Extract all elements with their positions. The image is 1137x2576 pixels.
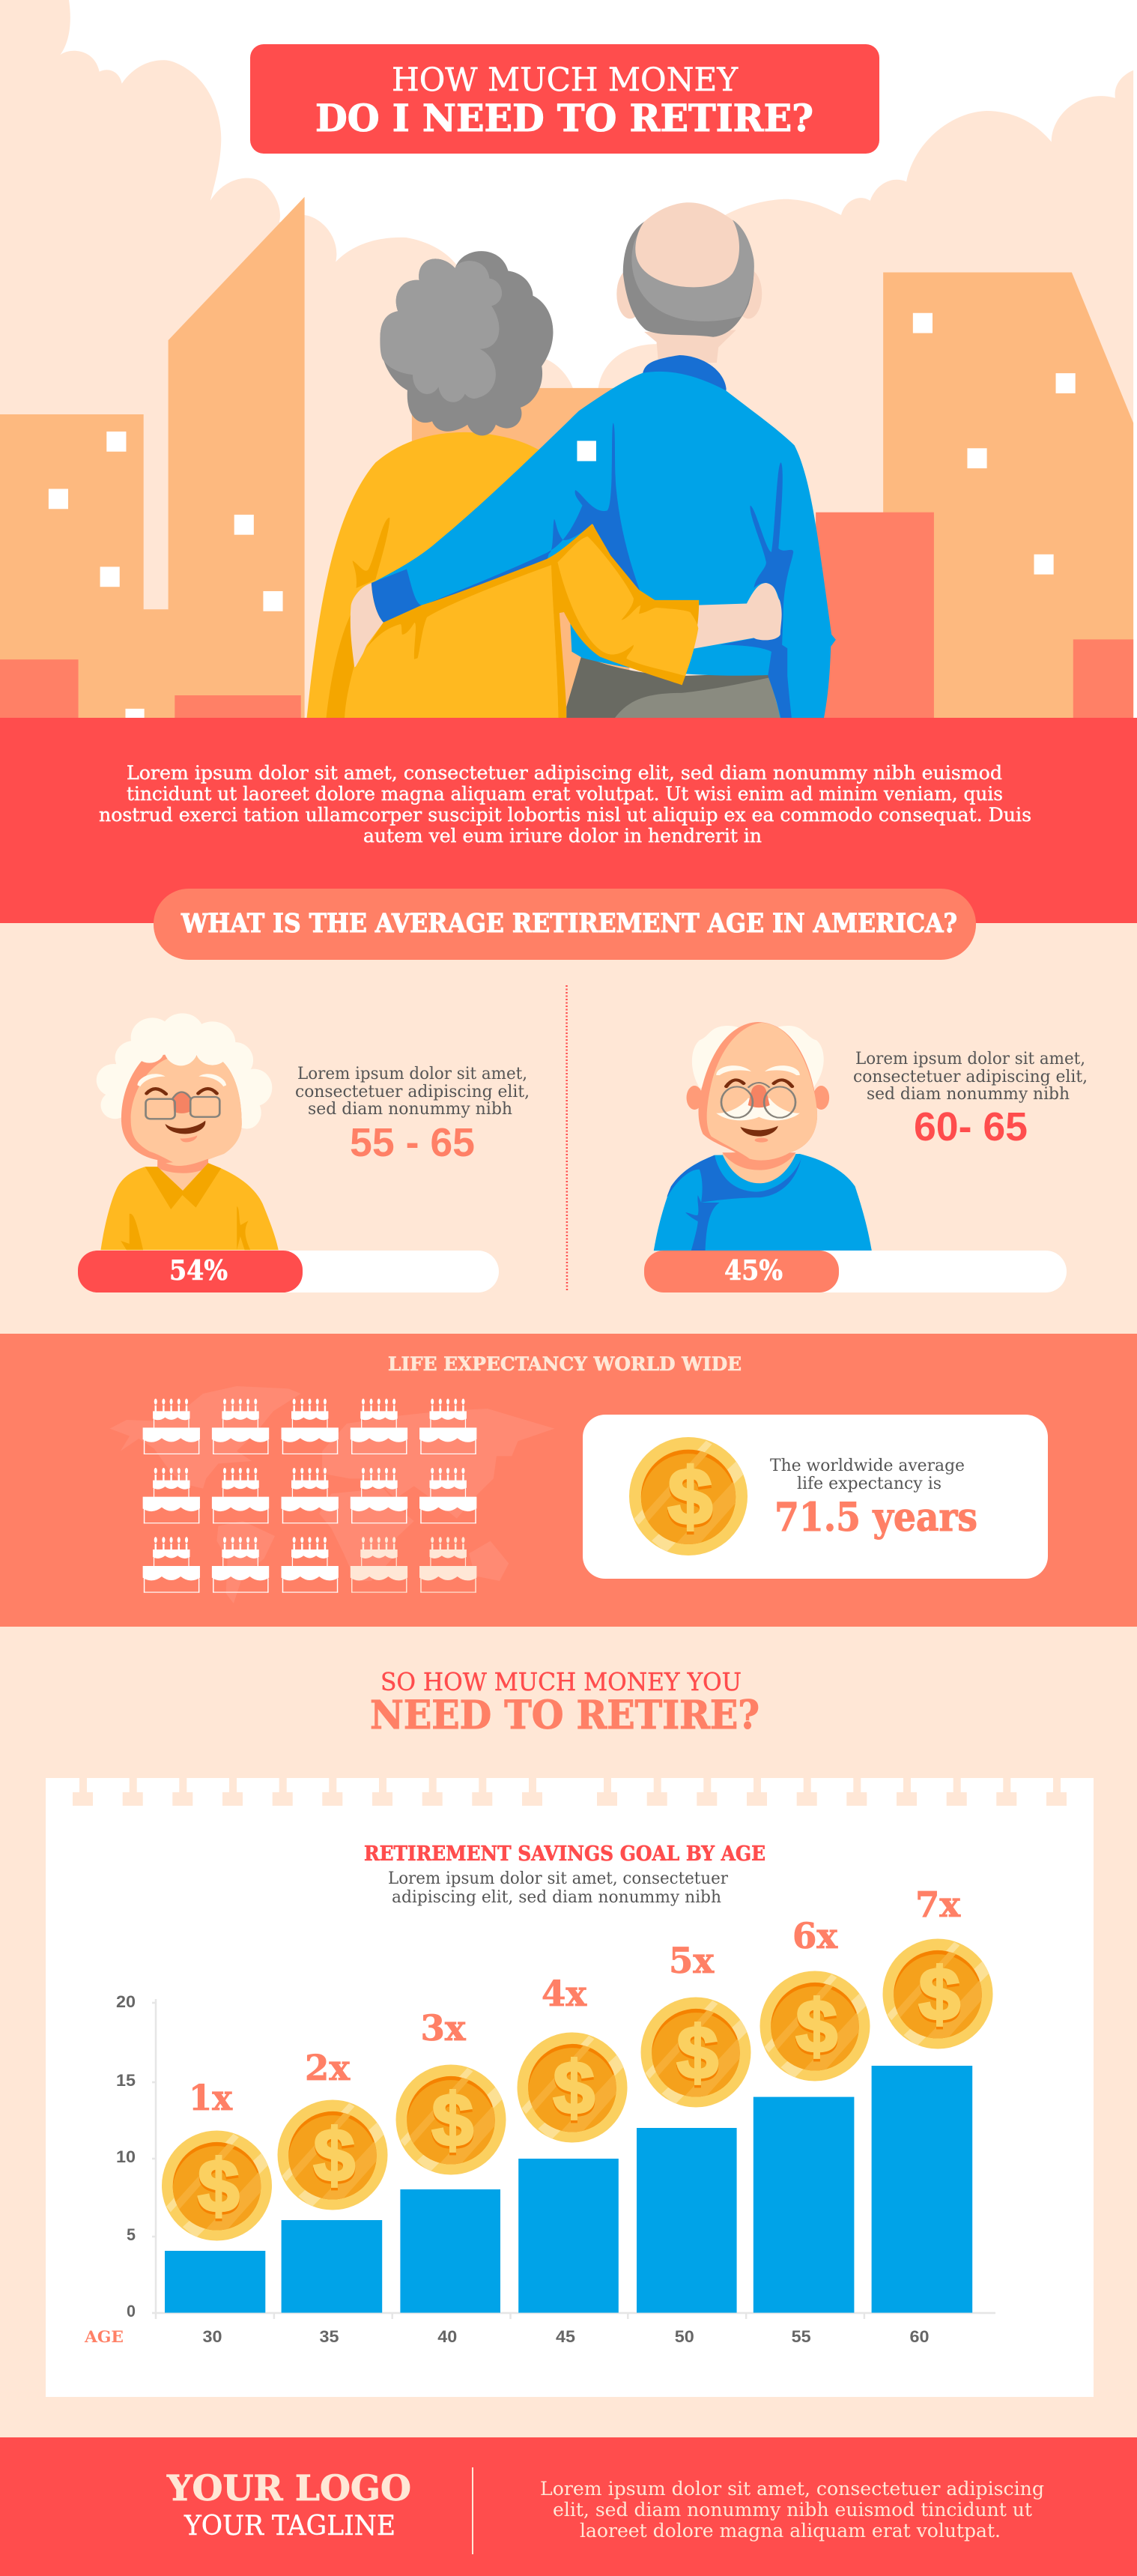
woman body (306, 432, 566, 719)
title line 2: DO I NEED TO RETIRE? (315, 96, 813, 140)
panel: women retirement age (78, 1013, 530, 1292)
intro text: Lorem ipsum dolor sit amet, consectetuer adipiscing elit, sed diam nonummy nibh euismod (127, 762, 1002, 784)
coin stack markers: $ (796, 1986, 837, 2069)
bar chart: 30 (202, 2327, 222, 2346)
coin stack markers: $ (432, 2081, 473, 2165)
card text (770, 1457, 965, 1493)
multiplier labels: 3x (421, 2008, 466, 2049)
bar chart: 40 (437, 2327, 457, 2346)
bar chart: 35 (319, 2327, 339, 2346)
footer text: Lorem ipsum dolor sit amet, consectetuer adipiscing (540, 2478, 1044, 2500)
intro text: tincidunt ut laoreet dolore magna aliquam erat volutpat. Ut wisi enim ad minim veniam, quis (127, 783, 1003, 805)
coin stack markers: $ (314, 2114, 355, 2198)
women description text: consectetuer adipiscing elit, (295, 1083, 530, 1101)
panel: life expectancy (0, 1334, 1137, 1627)
men progress bar (644, 1251, 1067, 1292)
women description text (295, 1065, 530, 1119)
icon: gold coin: $ (668, 1451, 712, 1541)
multiplier labels: 7x (915, 1884, 961, 1926)
footer divider (472, 2467, 473, 2554)
intro text: autem vel eum iriure dolor in hendrerit in (363, 825, 762, 847)
chart subtitle: adipiscing elit, sed diam nonummy nibh (392, 1888, 721, 1907)
women description text: Lorem ipsum dolor sit amet, (297, 1065, 527, 1083)
chart subtitle (388, 1869, 729, 1907)
bar chart: 45 (556, 2327, 575, 2346)
women description text: sed diam nonummy nibh (308, 1100, 512, 1119)
men description text: sed diam nonummy nibh (867, 1085, 1070, 1104)
elderly couple seen from behind (306, 202, 836, 719)
card text: life expectancy is (797, 1475, 942, 1493)
woman sleeve (345, 524, 699, 719)
chart subtitle: Lorem ipsum dolor sit amet, consectetuer (388, 1869, 729, 1888)
footer text: laoreet dolore magna aliquam erat volutpat. (580, 2520, 1001, 2542)
life expectancy heading: LIFE EXPECTANCY WORLD WIDE (388, 1353, 742, 1375)
intro band (0, 718, 1137, 923)
man hand on woman's shoulder side (351, 583, 383, 667)
bar chart: 60 (909, 2327, 929, 2346)
birthday cake pictogram grid (143, 1399, 476, 1593)
tagline: YOUR TAGLINE (184, 2511, 395, 2542)
bar chart: 55 (792, 2327, 811, 2346)
multiplier labels: 5x (669, 1941, 715, 1982)
bar chart: 10 (116, 2147, 136, 2166)
bar chart (84, 1992, 995, 2346)
icon: gold coin: $ (668, 1454, 712, 1544)
title line 1: HOW MUCH MONEY (392, 61, 738, 99)
coin stack markers: $ (677, 2012, 718, 2095)
section heading: how much money: SO HOW MUCH MONEY YOU (380, 1667, 742, 1696)
men progress bar: 45% (724, 1255, 783, 1287)
coin stack markers (162, 1939, 993, 2240)
coin stack markers: $ (919, 1956, 960, 2039)
coin stack markers: $ (919, 1953, 960, 2037)
window peeking over shirt (577, 441, 596, 461)
section heading: how much money: NEED TO RETIRE? (370, 1693, 759, 1738)
women progress bar (78, 1251, 499, 1292)
coin stack markers: $ (677, 2014, 718, 2097)
panel: notepaper chart card (46, 1778, 1094, 2397)
multiplier labels (189, 1884, 961, 2119)
multiplier labels: 6x (792, 1916, 838, 1957)
coin stack markers: $ (796, 1988, 837, 2071)
icon: gold coin (629, 1437, 748, 1555)
hero scene (0, 0, 1137, 722)
man shirt (372, 355, 836, 719)
intro text (99, 762, 1031, 847)
coin stack markers: $ (554, 2049, 595, 2132)
title banner (250, 44, 879, 154)
faint world map (110, 1386, 554, 1603)
coin stack markers: $ (198, 2147, 239, 2231)
card text: The worldwide average (770, 1457, 965, 1475)
women age range: 55 - 65 (350, 1120, 475, 1165)
icon: smiling elderly woman (97, 1013, 279, 1250)
woman hair (380, 251, 553, 435)
multiplier labels: 2x (305, 2048, 351, 2089)
intro text: nostrud exerci tation ullamcorper suscipit lobortis nisl ut aliquip ex ea commodo consequat. Duis (99, 804, 1031, 826)
footer text (540, 2478, 1044, 2542)
bar chart: 15 (116, 2071, 136, 2090)
life expectancy value: 71.5 years (774, 1495, 977, 1541)
women progress bar: 54% (169, 1255, 228, 1287)
men age range: 60- 65 (914, 1104, 1028, 1149)
panel: men retirement age (644, 1022, 1088, 1292)
section heading: how much money (370, 1667, 759, 1738)
bar chart: 0 (127, 2302, 136, 2320)
multiplier labels: 1x (189, 2078, 233, 2119)
section heading pill: WHAT IS THE AVERAGE RETIREMENT AGE IN AMERICA? (181, 908, 957, 939)
logo: YOUR LOGO (166, 2468, 411, 2509)
footer band (0, 2437, 1137, 2576)
man trousers (566, 655, 781, 719)
man head (616, 202, 762, 363)
coin stack markers: $ (314, 2117, 355, 2200)
hero backdrop: clouds and buildings (0, 0, 1133, 722)
men description text: consectetuer adipiscing elit, (853, 1068, 1088, 1086)
chart title: RETIREMENT SAVINGS GOAL BY AGE (364, 1842, 765, 1866)
men description text: Lorem ipsum dolor sit amet, (855, 1050, 1085, 1068)
life expectancy card (583, 1415, 1048, 1579)
bar chart: 50 (675, 2327, 694, 2346)
men description text (853, 1050, 1088, 1104)
section heading pill (154, 889, 976, 960)
age axis label: AGE (84, 2327, 124, 2346)
dotted divider (566, 985, 568, 1291)
coin stack markers: $ (198, 2145, 239, 2228)
footer text: elit, sed diam nonummy nibh euismod tincidunt ut (553, 2499, 1032, 2521)
coin stack markers: $ (554, 2047, 595, 2130)
icon: smiling elderly man (654, 1022, 872, 1251)
multiplier labels: 4x (542, 1974, 587, 2015)
bar chart: 20 (116, 1992, 136, 2011)
woman forearm and hand (692, 583, 782, 649)
coin stack markers: $ (432, 2079, 473, 2162)
bar chart: 5 (127, 2225, 136, 2244)
